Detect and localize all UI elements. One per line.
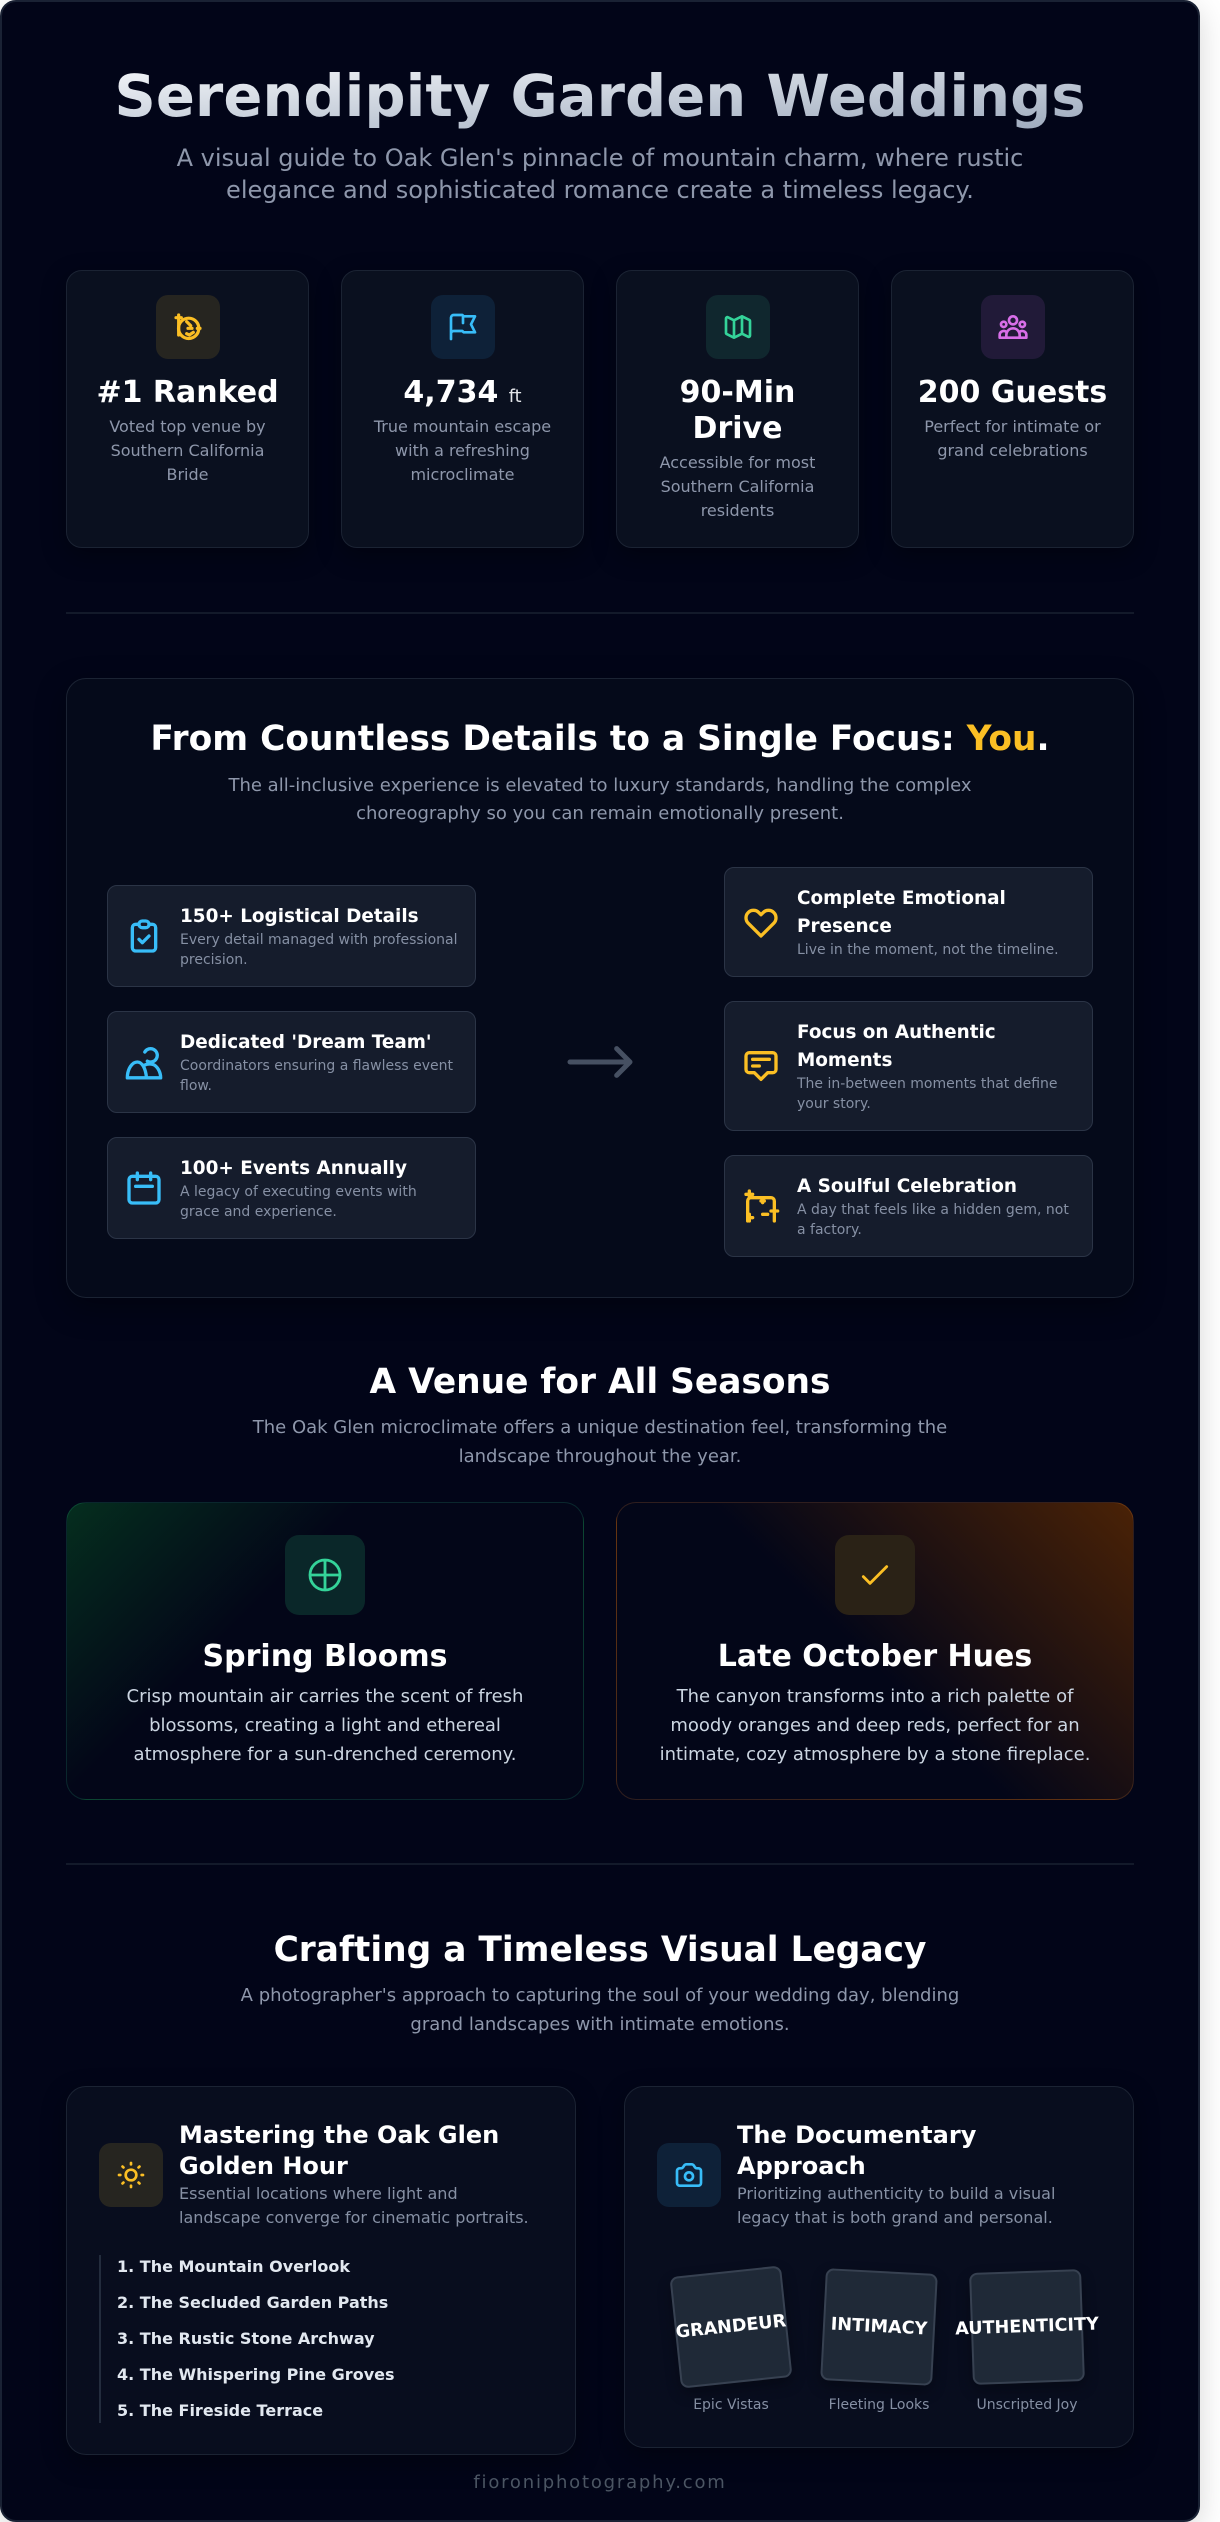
stat card: elevation: 4,734 ft (403, 375, 522, 410)
card: spring blooms: atmosphere for a sun-drenched ceremony. (134, 1744, 516, 1765)
item: emotional presence (724, 867, 1093, 977)
location list: 5. The Fireside Terrace (117, 2401, 323, 2420)
stat card: ranked: Voted top venue by (109, 417, 266, 436)
footer: fioroniphotography.com (473, 2472, 727, 2493)
stat card: drive: residents (701, 501, 774, 520)
icon: calendar (127, 1171, 161, 1205)
icon: people group (980, 295, 1044, 359)
photo tile: authenticity: Unscripted Joy (976, 2397, 1078, 2413)
card: late october hues: The canyon transforms into a rich palette of (677, 1686, 1073, 1707)
card: late october hues: intimate, cozy atmosphere by a stone fireplace. (660, 1744, 1090, 1765)
item: soulful celebration: a factory. (797, 1222, 862, 1238)
panel: golden hour (66, 2086, 576, 2455)
card: spring blooms: Spring Blooms (203, 1639, 447, 1674)
icon: clipboard check (130, 919, 158, 953)
icon: sparkle badge (156, 295, 220, 359)
item: emotional presence: Complete Emotional (797, 888, 1006, 909)
stat card: guests (891, 270, 1134, 548)
golden hour header: Essential locations where light and (179, 2184, 458, 2203)
golden hour header: Golden Hour (179, 2152, 348, 2180)
photo tile: grandeur (670, 2266, 792, 2413)
icon: chat bubble (744, 1051, 778, 1082)
item: logistical details: 150+ Logistical Details (180, 906, 419, 927)
location list: 2. The Secluded Garden Paths (117, 2293, 388, 2312)
stat card: drive: Accessible for most (660, 453, 815, 472)
item: events annually (107, 1137, 476, 1239)
icon: check (835, 1535, 915, 1615)
stat card: guests: grand celebrations (937, 441, 1088, 460)
golden hour header: Mastering the Oak Glen (179, 2121, 499, 2149)
item: dream team: Dedicated 'Dream Team' (180, 1032, 432, 1053)
panel intro text: choreography so you can remain emotionally present. (356, 803, 844, 824)
item: logistical details (107, 885, 476, 987)
item: authentic moments: The in-between moments that define (797, 1076, 1058, 1092)
icon: map (706, 295, 770, 359)
item: events annually: A legacy of executing events with (180, 1184, 417, 1200)
stat card: guests: Perfect for intimate or (924, 417, 1101, 436)
icon: camera (657, 2143, 721, 2207)
seasons intro text: landscape throughout the year. (459, 1446, 741, 1467)
seasons cards (66, 1502, 1134, 1800)
legacy title: Crafting a Timeless Visual Legacy (274, 1930, 926, 1970)
subtitle (176, 144, 1023, 204)
documentary header: Approach (737, 2152, 866, 2180)
icon: circle cross (285, 1535, 365, 1615)
subtitle: elegance and sophisticated romance create a timeless legacy. (226, 176, 974, 204)
photo tile: grandeur: GRANDEUR (675, 2311, 787, 2343)
item: authentic moments: your story. (797, 1096, 871, 1112)
item: dream team (107, 1011, 476, 1113)
item: soulful celebration (724, 1155, 1093, 1257)
stat card: elevation: microclimate (410, 465, 515, 484)
stat card: elevation: with a refreshing (395, 441, 530, 460)
stat card: drive: 90-Min (680, 375, 795, 410)
stat card: ranked (66, 270, 309, 548)
card: late october hues: moody oranges and deep reds, perfect for an (670, 1715, 1080, 1736)
title: Serendipity Garden Weddings (114, 63, 1086, 130)
item: logistical details: precision. (180, 952, 248, 968)
location list: 3. The Rustic Stone Archway (117, 2329, 375, 2348)
seasons intro text (252, 1417, 947, 1467)
card: spring blooms: Crisp mountain air carries the scent of fresh (127, 1686, 523, 1707)
item: authentic moments (724, 1001, 1093, 1131)
photo tile: intimacy: INTIMACY (830, 2314, 928, 2340)
stat card: drive: Drive (693, 411, 782, 446)
stat card: elevation: True mountain escape (374, 417, 551, 436)
item: authentic moments: Focus on Authentic (797, 1022, 996, 1043)
section heading: seasons (252, 1362, 947, 1467)
card: late october hues (616, 1502, 1134, 1800)
stat card: elevation (341, 270, 584, 548)
column: outcomes (724, 867, 1093, 1257)
legacy intro text (240, 1985, 959, 2035)
card: spring blooms (66, 1502, 584, 1800)
item: dream team: flow. (180, 1078, 212, 1094)
stat card: guests: 200 Guests (918, 375, 1107, 410)
photo tile: intimacy: Fleeting Looks (829, 2397, 929, 2413)
panel intro text: The all-inclusive experience is elevated to luxury standards, handling the complex (228, 775, 972, 796)
card: spring blooms: blossoms, creating a light and ethereal (149, 1715, 501, 1736)
legacy intro text: A photographer's approach to capturing the soul of your wedding day, blending (241, 1985, 959, 2006)
location list: 1. The Mountain Overlook (117, 2257, 350, 2276)
photo tile: authenticity (955, 2269, 1099, 2413)
stat card: drive (616, 270, 859, 548)
legacy intro text: grand landscapes with intimate emotions. (410, 2014, 790, 2035)
stat card: ranked: Southern California (111, 441, 264, 460)
item: authentic moments: Moments (797, 1050, 892, 1071)
photo tile: grandeur: Epic Vistas (693, 2397, 769, 2413)
panel heading: From Countless Details to a Single Focus: You. (150, 719, 1050, 759)
item: events annually: grace and experience. (180, 1204, 337, 1220)
icon: sun (99, 2143, 163, 2207)
arrow (568, 1046, 632, 1078)
seasons intro text: The Oak Glen microclimate offers a unique destination feel, transforming the (253, 1417, 947, 1438)
stat card: drive: Southern California (661, 477, 814, 496)
item: emotional presence: Presence (797, 916, 892, 937)
documentary header: legacy that is both grand and personal. (737, 2208, 1053, 2227)
stat card: ranked: #1 Ranked (96, 375, 279, 410)
seasons title: A Venue for All Seasons (370, 1362, 830, 1402)
stat card: ranked: Bride (166, 465, 208, 484)
photo tile: authenticity: AUTHENTICITY (955, 2315, 1099, 2339)
column: logistics (107, 885, 476, 1239)
icon: heart (744, 908, 778, 938)
golden hour header: landscape converge for cinematic portraits. (179, 2208, 529, 2227)
location list: 4. The Whispering Pine Groves (117, 2365, 394, 2384)
item: soulful celebration: A day that feels like a hidden gem, not (797, 1202, 1069, 1218)
location list (99, 2255, 499, 2423)
documentary header: The Documentary (737, 2121, 976, 2149)
documentary header: Prioritizing authenticity to build a visual (737, 2184, 1055, 2203)
item: emotional presence: Live in the moment, not the timeline. (797, 942, 1059, 958)
section heading: visual legacy (240, 1930, 959, 2035)
card: late october hues: Late October Hues (718, 1639, 1032, 1674)
panel intro text (228, 775, 972, 824)
icon: flag (430, 295, 494, 359)
item: events annually: 100+ Events Annually (180, 1158, 407, 1179)
panel: documentary approach (624, 2086, 1134, 2448)
documentary header (657, 2121, 1055, 2227)
panel: from details to focus (66, 678, 1134, 1298)
stats row (66, 270, 1134, 548)
icon: team (126, 1047, 162, 1080)
item: dream team: Coordinators ensuring a flawless event (180, 1058, 453, 1074)
icon: sparkle frame (744, 1189, 780, 1223)
photo tile: intimacy (820, 2268, 938, 2413)
golden hour header (99, 2121, 529, 2227)
item: logistical details: Every detail managed with professional (180, 932, 458, 948)
item: soulful celebration: A Soulful Celebration (797, 1176, 1017, 1197)
subtitle: A visual guide to Oak Glen's pinnacle of mountain charm, where rustic (177, 144, 1023, 172)
